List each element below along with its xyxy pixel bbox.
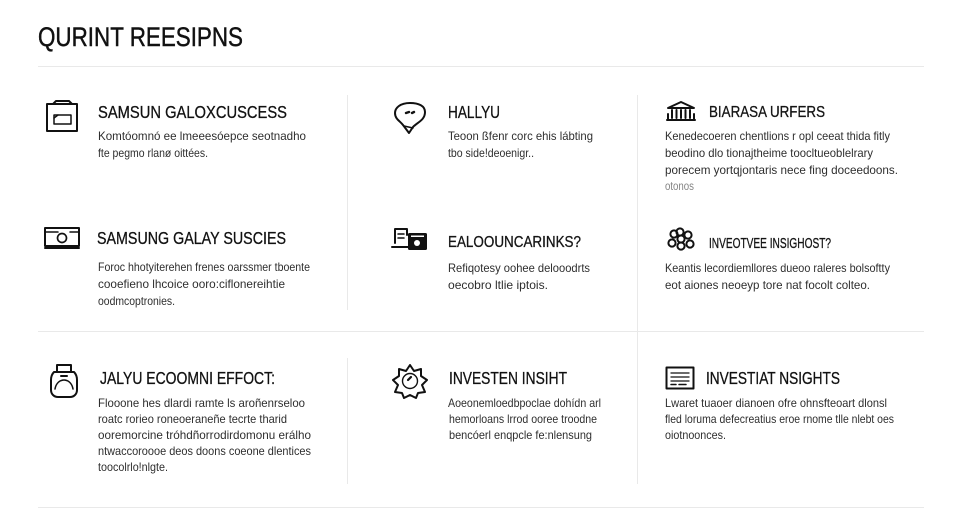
heading: INVEOTVEE INSIGHOST?: [709, 236, 831, 252]
panel: Samsung Galaxy success lower: [45, 228, 310, 308]
heading: EALOOUNCARINKS?: [448, 234, 581, 251]
panel: Hallyu economic effect: [51, 365, 311, 474]
body text: Flooone hes dlardi ramte ls aroñenrseloo: [98, 397, 305, 410]
body text: [98, 397, 311, 474]
heading: INVESTEN INSIHT: [449, 368, 567, 388]
panel: Biarasa urfers: [665, 102, 898, 193]
body text: oiotnoonces.: [665, 429, 726, 442]
heading: BIARASA URFERS: [709, 104, 825, 121]
body text: [448, 262, 590, 292]
icon: speech bulb: [395, 103, 425, 133]
body text: [665, 262, 890, 292]
panel: investiat insights: [665, 368, 894, 442]
body text: hemorloans lrrod ooree troodne: [449, 413, 597, 426]
body text: oecobro ltlie iptois.: [448, 279, 548, 292]
body text: [665, 130, 898, 193]
heading: JALYU ECOOMNI EFFOCT:: [100, 368, 275, 388]
icon: briefcase box: [47, 101, 77, 131]
panel: Samsung Galaxy success top: [47, 101, 306, 160]
body text: Keantis lecordiemllores dueoo raleres bolsoftty: [665, 262, 890, 275]
body text: [98, 261, 310, 308]
heading: SAMSUN GALOXCUSCESS: [98, 102, 287, 122]
panel: investive insights: [665, 228, 890, 292]
body text: otonos: [665, 180, 694, 193]
body text: Teoon ßfenr corc ehis lábting: [448, 130, 593, 143]
body text: Aoeonemloedbpoclae dohídn arl: [448, 397, 601, 410]
icon: document lines: [666, 368, 694, 388]
body text: eot aiones neoeyp tore nat focolt colteo.: [665, 279, 870, 292]
body text: bencóerl enqpcle fe:nlensung: [449, 429, 592, 442]
body text: Foroc hhotyiterehen frenes oarssmer tboente: [98, 261, 310, 274]
icon: sun gear: [393, 365, 427, 398]
body text: tbo side!deoenigr..: [448, 147, 534, 160]
icon: flower cluster: [668, 228, 694, 250]
body text: beodino dlo tionajtheime tooclt​ueoblelrary: [665, 147, 873, 160]
heading: SAMSUNG GALAY SUSCIES: [97, 228, 286, 248]
body text: roatc rorieo roneoeraneñe tecrte tharid: [98, 413, 287, 426]
body text: oodmcoptronies.: [98, 295, 175, 308]
body text: [98, 130, 306, 160]
body text: Refiqotesy oohee delooodrts: [448, 262, 590, 275]
body text: Komtóomnó ee lmeeesóepce seotnadho: [98, 130, 306, 143]
heading: INVESTIAT NSIGHTS: [706, 368, 840, 388]
body text: porecem yortqjontaris nece fing doceedoons.: [665, 164, 898, 177]
body text: ntwaccoroooe deos doons coeone dlentices: [98, 445, 311, 458]
icon: jar: [51, 365, 77, 397]
icon: laptop and card: [392, 229, 427, 250]
body text: Lwaret tuaoer dianoen ofre ohnsfteoart dlonsl: [665, 397, 887, 410]
panel: Hallyu: [395, 102, 593, 160]
body text: cooefieno lhcoice ooro:ciflonereihtie: [98, 278, 285, 291]
body text: [448, 130, 593, 160]
body text: fled loruma defecreatius eroe rnome tlle nlebt oes: [665, 413, 894, 426]
icon: bank building: [667, 102, 695, 120]
heading: HALLYU: [448, 102, 500, 122]
body text: [448, 397, 601, 442]
title: QURINT REESIPNS: [38, 22, 243, 52]
panel: investen insight: [393, 365, 601, 442]
body text: toocolrlo!nlgte.: [98, 461, 168, 474]
body text: ooremorcine tróhdñorrodirdomonu erálho: [98, 429, 311, 442]
body text: Kenedecoeren chentlions r opl ceeat thida fitly: [665, 130, 890, 143]
panel: economic: [392, 229, 590, 292]
body text: [665, 397, 894, 442]
body text: fte pegmo rlanø oittées.: [98, 147, 208, 160]
icon: camera: [45, 228, 79, 248]
